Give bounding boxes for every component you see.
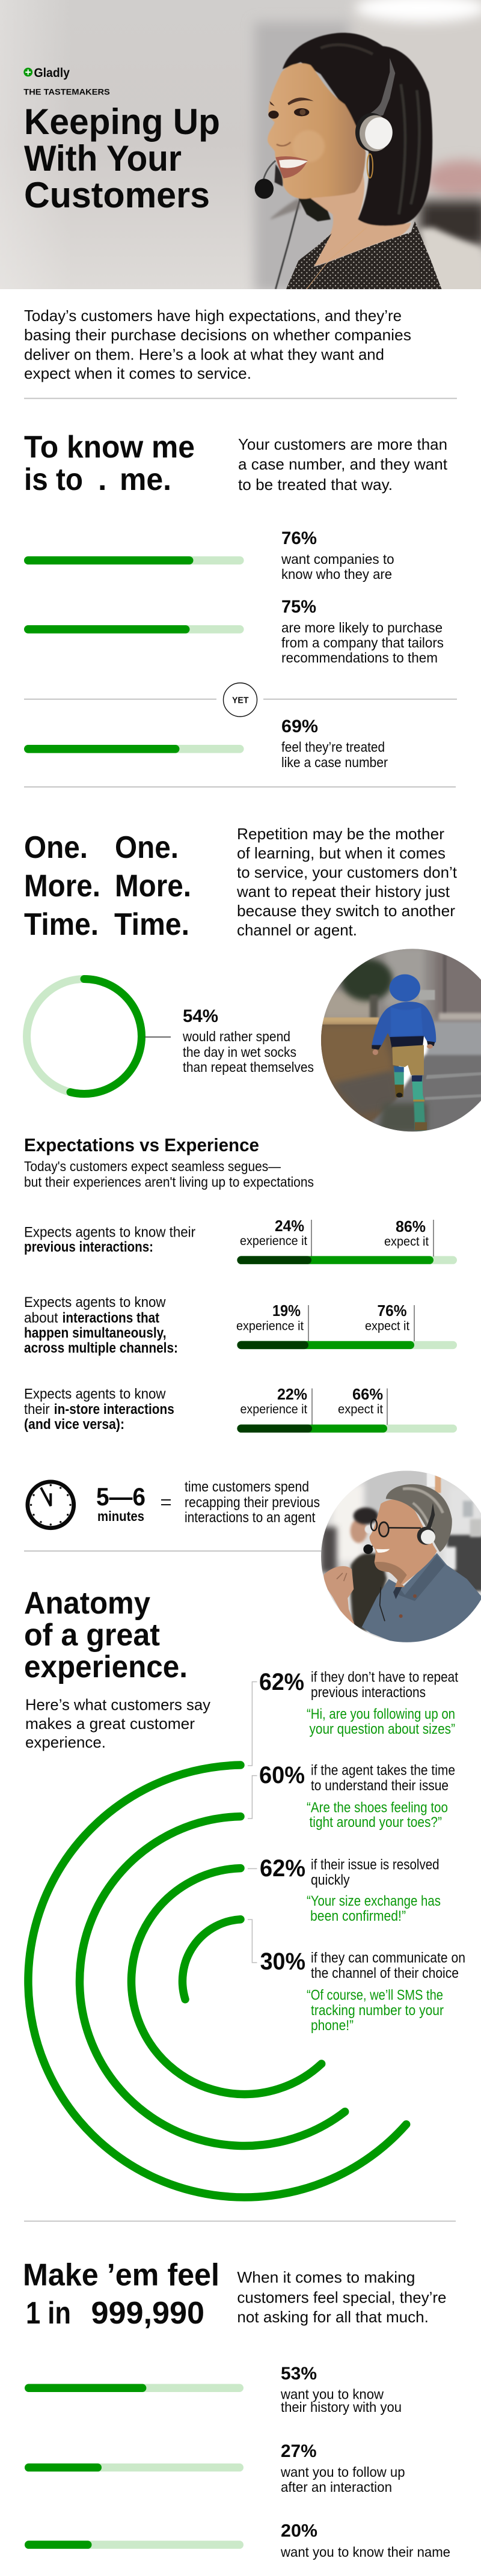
stat: experience 19%: [236, 1302, 304, 1333]
section intro text: to be treated that way.: [238, 476, 393, 494]
section intro text: of learning, but when it comes: [237, 844, 446, 862]
text: time customers spend: time customers spend: [185, 1479, 309, 1495]
stat: 69%: like a case number: [281, 754, 388, 770]
row label: interactions that: [63, 1310, 159, 1326]
equals sign: [161, 1499, 171, 1505]
stat: 30% channel of choice: tracking number to your: [311, 2002, 444, 2019]
bar chart: 22% vs 66%: [237, 1389, 457, 1433]
title: [24, 102, 220, 215]
section intro text: [25, 1695, 210, 1751]
stat: experience 19%: experience it: [236, 1319, 304, 1333]
heading: make 'em feel: Make ’em feel: [23, 2258, 219, 2293]
stat: 20%: want you to know their name: [280, 2544, 450, 2560]
stat: experience 22%: experience it: [240, 1403, 307, 1416]
heading: make 'em feel: [23, 2258, 219, 2331]
stat: 53%: [280, 2364, 402, 2415]
stat: 62% no repeating: previous interactions: [311, 1684, 426, 1701]
bar chart: 53%: [25, 2384, 244, 2392]
panel: one more time: [23, 825, 481, 2560]
stat: experience 22%: [240, 1385, 307, 1416]
stat: 30% channel of choice: “Of course, we’ll SMS the: [307, 1987, 443, 2003]
stat: experience 22%: 22%: [277, 1385, 307, 1403]
text: time customers spend: interactions to an agent: [185, 1510, 316, 1526]
stat: 60% understands issue: to understand their issue: [311, 1778, 449, 1794]
stat: expect 66%: expect it: [338, 1403, 383, 1416]
stat: expect 76%: [365, 1302, 409, 1333]
stat: expect 66%: [338, 1385, 383, 1416]
logo: Gladly: Gladly: [34, 66, 70, 80]
stat: 60% understands issue: “Are the shoes feeling too: [307, 1800, 448, 1816]
row label: happen simultaneously,: [24, 1325, 166, 1341]
bar chart: 20%: [25, 2541, 244, 2549]
stat: 60% understands issue: tight around your toes?”: [309, 1814, 442, 1831]
heading: anatomy: [24, 1586, 188, 1684]
stat: 75%: recommendations to them: [281, 650, 438, 665]
intro paragraph: [24, 307, 411, 382]
row: in-store interactions: [24, 1385, 457, 1433]
stat: expect 76%: expect it: [365, 1319, 409, 1333]
row: previous interactions: [24, 1217, 457, 1264]
stat: 54%: [182, 1006, 314, 1075]
stat: 69%: 69%: [281, 717, 318, 736]
section intro text: [236, 825, 458, 939]
heading: to know me is to . me.: is to: [24, 462, 83, 497]
panel: make 'em feel 1 in 999,990: [23, 2258, 450, 2560]
heading: one more time: Time.: [114, 907, 189, 942]
stat: 53%: want you to know: [280, 2387, 384, 2402]
section intro text: want to repeat their history just: [236, 883, 450, 901]
badge: YET: YET: [232, 695, 249, 706]
subheading: but their experiences aren't living up to expectations: [24, 1174, 314, 1190]
stat: 62% no repeating: if they don’t have to repeat: [311, 1669, 458, 1686]
title: Customers: [24, 175, 210, 215]
section intro text: to service, your customers don’t: [237, 863, 458, 881]
stat: 75%: from a company that tailors: [281, 635, 444, 650]
row label: [24, 1224, 195, 1255]
stat: experience 24%: 24%: [275, 1217, 304, 1235]
stat: expect 86%: [384, 1217, 429, 1249]
heading: one more time: [24, 830, 191, 942]
heading: anatomy: of a great: [24, 1618, 160, 1653]
heading: anatomy: experience.: [24, 1650, 188, 1684]
stat: 5—6 minutes: [96, 1482, 146, 1524]
stat: 62% no repeating: 62%: [259, 1669, 304, 1695]
subheading: Today's customers expect seamless segues—: [24, 1158, 281, 1174]
stat: 76%: [281, 528, 394, 582]
icon: clock: [28, 1482, 74, 1528]
stat: 76%: 76%: [281, 528, 317, 548]
row label: across multiple channels:: [24, 1340, 178, 1356]
section intro text: channel or agent.: [237, 921, 357, 939]
section intro text: a case number, and they want: [238, 455, 448, 473]
stat: 30% channel of choice: 30%: [260, 1948, 305, 1975]
stat: 76%: want companies to: [281, 551, 394, 567]
photo: smiling male agent with headset: [319, 1467, 481, 1644]
heading: to know me is to . me.: [24, 430, 195, 497]
section intro text: Your customers are more than: [238, 435, 447, 453]
stat: 20%: [280, 2521, 450, 2560]
stat: 62% resolved quickly: if their issue is resolved: [311, 1856, 440, 1873]
section intro text: [237, 2268, 446, 2326]
heading: expectations vs experience: Expectations vs Experience: [24, 1134, 259, 1155]
heading: one more time: One.: [24, 830, 88, 865]
heading: one more time: One.: [115, 830, 179, 865]
bar chart: 27%: [25, 2464, 244, 2471]
section intro text: not asking for all that much.: [237, 2308, 429, 2326]
subheading: [24, 1158, 314, 1190]
row label: (and vice versa):: [24, 1416, 124, 1433]
bar chart: 19% vs 76%: [237, 1305, 457, 1349]
photo: child in rain boots walking on wet road: [319, 947, 481, 1133]
stat: 27%: want you to follow up: [280, 2464, 405, 2480]
stat: 30% channel of choice: the channel of their choice: [311, 1965, 459, 1981]
row label: in-store interactions: [54, 1401, 174, 1418]
section intro text: makes a great customer: [25, 1715, 195, 1733]
stat: expect 86%: 86%: [396, 1217, 426, 1235]
stat: 60% understands issue: if the agent takes the time: [311, 1763, 455, 1778]
stat: 62% resolved quickly: 62%: [260, 1855, 305, 1882]
stat: 54%: the day in wet socks: [183, 1044, 296, 1060]
stat: 53%: 53%: [281, 2364, 317, 2384]
text: time customers spend: [185, 1479, 320, 1526]
section intro text: Here’s what customers say: [25, 1695, 210, 1713]
title: Keeping Up: [24, 102, 220, 142]
chart: concentric arcs: [28, 1765, 406, 2197]
stat: 20%: 20%: [281, 2521, 317, 2541]
row label: Expects agents to know their: [24, 1224, 195, 1241]
stat: expect 66%: 66%: [352, 1385, 383, 1403]
panel: anatomy of a great experience: [24, 1586, 465, 2197]
bar chart: 75%: [24, 625, 244, 634]
stat: experience 24%: experience it: [240, 1234, 307, 1248]
heading: one more time: More.: [115, 869, 191, 904]
heading: make 'em feel: 1 in: [26, 2296, 71, 2331]
row label: [24, 1386, 174, 1433]
section intro text: customers feel special, they’re: [237, 2288, 446, 2306]
stat: 5—6 minutes: minutes: [97, 1508, 144, 1524]
heading: to know me is to . me.: To know me: [24, 430, 195, 465]
stat: 62% no repeating: [259, 1669, 458, 1737]
stat: 54%: would rather spend: [182, 1029, 290, 1044]
stat: expect 86%: expect it: [384, 1235, 429, 1249]
stat: 30% channel of choice: [260, 1948, 465, 2034]
stat: 54%: than repeat themselves: [183, 1059, 314, 1075]
bar chart: 76%: [24, 556, 244, 564]
stat: 27%: after an interaction: [281, 2479, 392, 2495]
badge: YET: [224, 683, 257, 717]
row label: [24, 1294, 178, 1356]
section intro text: experience.: [25, 1733, 106, 1751]
stat: 27%: [280, 2441, 405, 2495]
heading: one more time: Time.: [24, 907, 99, 942]
intro paragraph: deliver on them. Here’s a look at what they want and: [24, 345, 384, 363]
eyebrow: The Tastemakers: THE TASTEMAKERS: [23, 87, 110, 96]
intro paragraph: basing their purchase decisions on whether companies: [24, 326, 411, 344]
stat: 62% resolved quickly: been confirmed!”: [310, 1908, 406, 1924]
row: simultaneous interactions: [24, 1294, 457, 1356]
stat: 62% resolved quickly: [260, 1855, 441, 1924]
heading: to know me is to . me.: .: [98, 462, 106, 497]
stat: 62% no repeating: “Hi, are you following up on: [307, 1706, 455, 1722]
stat: 75%: are more likely to purchase: [281, 620, 443, 635]
row label: Expects agents to know: [24, 1294, 166, 1311]
connectors: [248, 1682, 257, 1963]
stat: 54%: 54%: [183, 1006, 218, 1026]
text: time customers spend: recapping their previous: [185, 1495, 320, 1511]
stat: 62% resolved quickly: “Your size exchange has: [307, 1893, 441, 1909]
stat: 5—6 minutes: 5—6: [96, 1482, 146, 1511]
stat: 76%: know who they are: [281, 566, 392, 582]
section intro text: because they switch to another: [237, 902, 455, 920]
stat: 60% understands issue: [259, 1762, 455, 1831]
section intro text: [238, 435, 448, 494]
stat: experience 24%: [240, 1217, 307, 1248]
row label: their: [24, 1401, 50, 1418]
heading: to know me is to . me.: me.: [120, 462, 171, 497]
stat: 69%: feel they’re treated: [281, 739, 385, 755]
stat: 60% understands issue: 60%: [259, 1762, 305, 1788]
panel: hero photo of agent with headset: [0, 0, 481, 299]
title: With Your: [24, 138, 182, 179]
stat: 30% channel of choice: phone!”: [311, 2018, 354, 2034]
section intro text: When it comes to making: [237, 2268, 415, 2286]
stat: 75%: 75%: [281, 597, 316, 617]
intro paragraph: Today’s customers have high expectations, and they’re: [24, 307, 402, 325]
stat: 62% no repeating: your question about sizes”: [309, 1721, 455, 1737]
row label: Expects agents to know: [24, 1386, 166, 1402]
bar chart: 24% vs 86%: [237, 1220, 457, 1264]
heading: make 'em feel: 999,990: [91, 2296, 204, 2331]
heading: anatomy: Anatomy: [24, 1586, 150, 1621]
stat: 27%: 27%: [281, 2441, 316, 2461]
stat: experience 19%: 19%: [272, 1302, 301, 1320]
stat: 69%: [281, 717, 388, 770]
row label: previous interactions:: [24, 1239, 153, 1255]
row label: about: [24, 1310, 58, 1326]
stat: 62% resolved quickly: quickly: [311, 1872, 350, 1888]
stat: 53%: their history with you: [281, 2399, 402, 2415]
bar chart: 69%: [24, 745, 244, 753]
stat: 75%: [281, 597, 444, 665]
donut chart: 54%: [26, 979, 142, 1094]
stat: expect 76%: 76%: [378, 1302, 406, 1320]
intro paragraph: expect when it comes to service.: [24, 364, 251, 382]
panel: to know me: [24, 430, 457, 770]
section intro text: Repetition may be the mother: [237, 825, 444, 843]
heading: one more time: More.: [24, 869, 100, 904]
